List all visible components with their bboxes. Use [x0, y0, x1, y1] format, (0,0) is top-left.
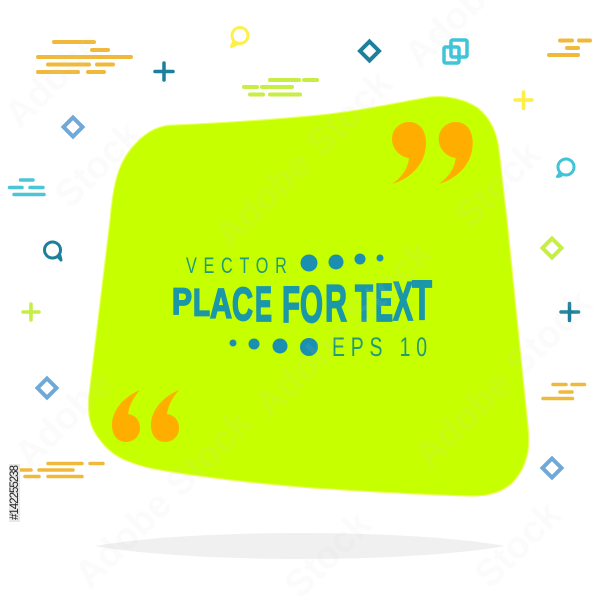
heading: place for text: L [193, 282, 210, 324]
heading: place for text [172, 268, 432, 334]
watermark: Adobe [7, 363, 120, 476]
opening quote mark [112, 390, 179, 442]
heading: place for text: X [393, 270, 413, 332]
watermark: Stock [467, 493, 570, 596]
icon: diamond teal top [360, 42, 379, 60]
heading: place for text: E [255, 278, 272, 332]
icon: diamond blue left [38, 378, 56, 398]
icon: speech bubble teal [44, 242, 61, 260]
icon: diamond blue top left [64, 118, 82, 136]
icon: plus teal top [155, 63, 173, 80]
heading: place for text: P [172, 281, 192, 322]
icon: speech bubble yellow [232, 28, 248, 46]
heading: place for text: F [282, 276, 300, 333]
speech panel [88, 97, 529, 496]
heading: place for text: O [300, 276, 323, 334]
dashes: orange bottom left [18, 464, 103, 476]
icon: plus yellow [515, 92, 532, 108]
heading: place for text: E [375, 273, 393, 333]
icon: diamond blue right [542, 458, 562, 478]
dashes: orange top left [38, 42, 131, 72]
icon: plus teal right [561, 304, 578, 320]
heading: place for text: T [412, 268, 432, 331]
watermark: Stock [447, 133, 550, 236]
dashes: orange right [543, 384, 584, 398]
stock id label: #142255238 [9, 465, 21, 520]
watermark: Adobe Stock [407, 282, 600, 476]
icons and dashes [10, 28, 590, 478]
icon: overlapping squares [444, 40, 467, 63]
heading: place for text: T [355, 275, 373, 333]
watermark: Adobe Stock [67, 402, 261, 596]
watermark: Stock [47, 113, 150, 216]
watermark: Adobe Stock [247, 232, 441, 426]
dots: upper row [300, 254, 384, 272]
icon: plus green [23, 304, 39, 320]
closing quote mark [392, 122, 473, 184]
dots: lower row [230, 338, 318, 356]
heading: place for text: C [232, 278, 253, 330]
watermark: Adobe Stock [207, 62, 401, 256]
dashes: orange top right [549, 40, 590, 55]
dashes: cyan left [10, 180, 44, 194]
text: vector: VECTOR [186, 253, 287, 279]
heading: place for text: R [325, 275, 347, 333]
dashes: green top [244, 80, 317, 94]
icon: speech bubble cyan [558, 159, 574, 176]
icon: diamond green right [542, 238, 562, 258]
heading: place for text: A [210, 280, 232, 327]
text: eps 10: EPS 10 [332, 332, 427, 362]
watermark: Adobe [0, 23, 110, 136]
ground shadow [95, 533, 505, 559]
